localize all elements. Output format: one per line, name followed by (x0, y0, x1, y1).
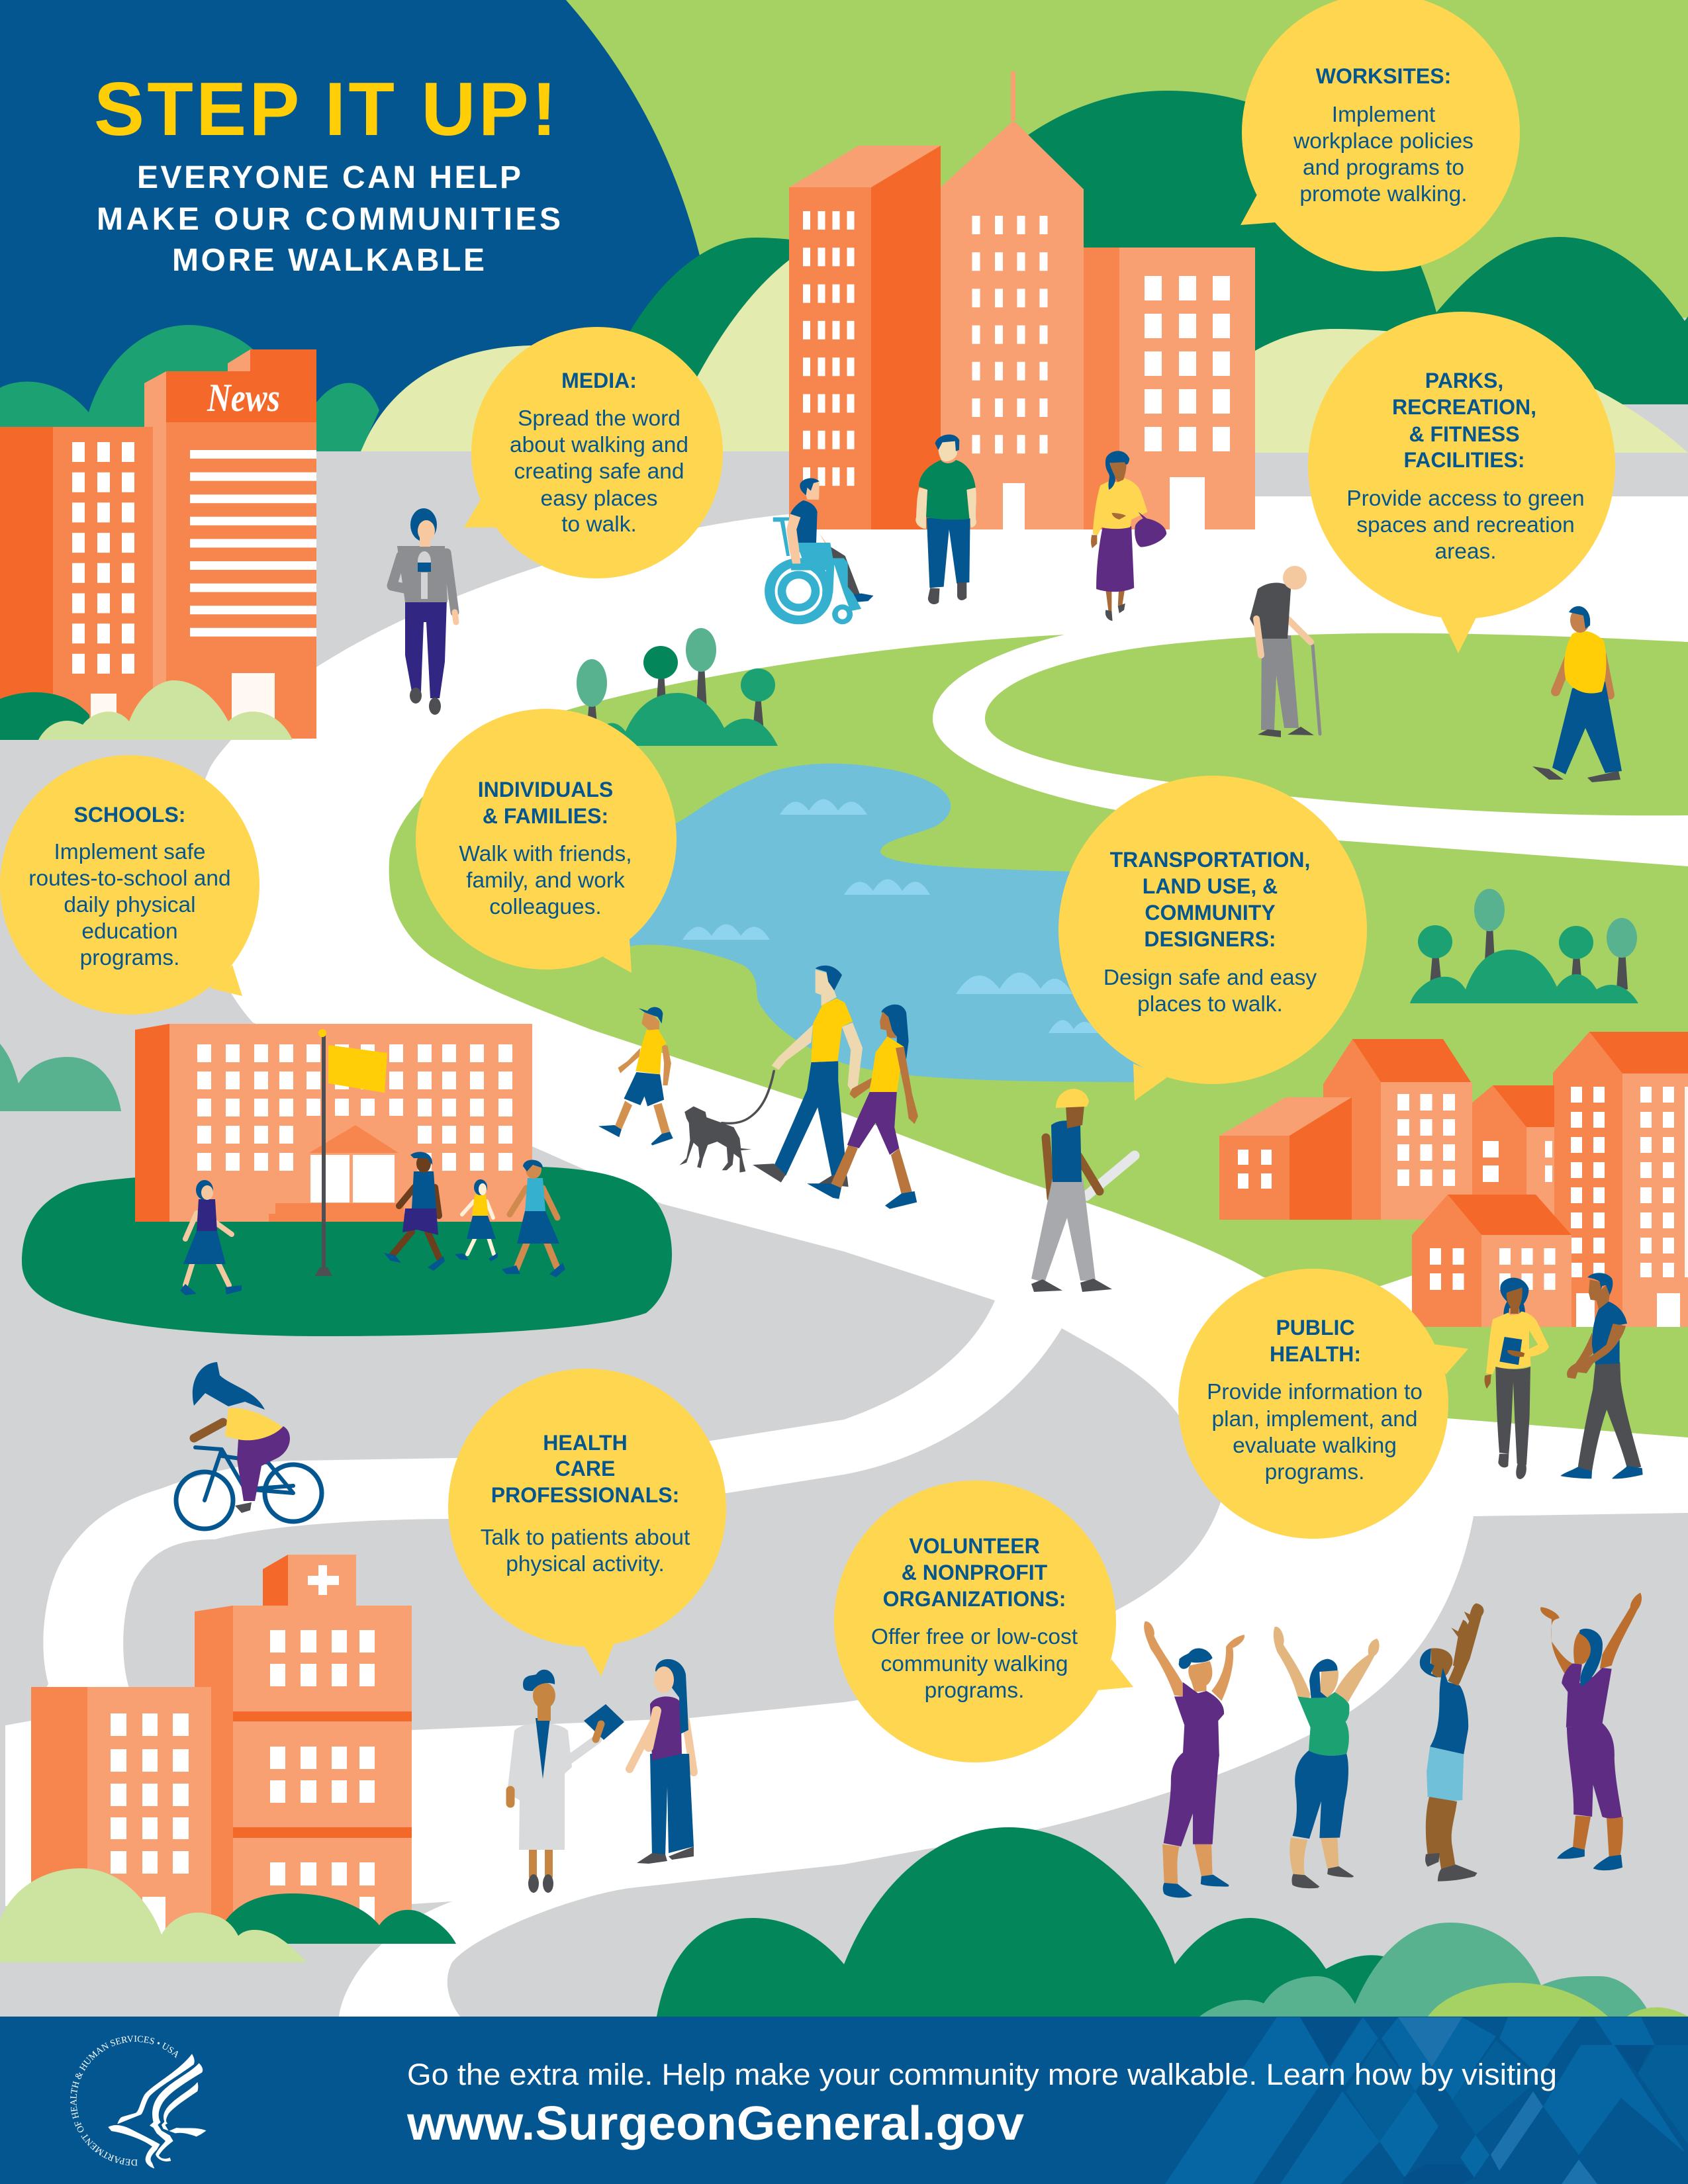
heading: health care: PROFESSIONALS: (491, 1483, 679, 1507)
body: individuals: family, and work (466, 868, 625, 893)
body: schools: programs. (80, 946, 179, 970)
title block (94, 68, 561, 278)
person: cyclist (176, 1362, 322, 1529)
heading: public health: PUBLIC (1276, 1316, 1355, 1340)
callout: public health (1178, 1269, 1468, 1539)
building: news (0, 325, 379, 740)
body: media: about walking and (510, 433, 688, 457)
heading: volunteer: VOLUNTEER (909, 1534, 1040, 1558)
callout: health care professionals (448, 1369, 726, 1676)
footer text: Go the extra mile. Help make your community more walkable. Learn how by visiting (407, 2058, 1557, 2091)
body: transportation: Design safe and easy (1103, 966, 1317, 990)
heading: individuals: & FAMILIES: (483, 804, 608, 828)
body: worksites: workplace policies (1293, 129, 1474, 154)
heading: parks: RECREATION, (1392, 395, 1536, 419)
body: schools: daily physical (64, 893, 196, 917)
body: worksites: and programs to (1303, 156, 1464, 180)
subtitle: MAKE OUR COMMUNITIES (97, 202, 561, 237)
trees: right grove (1410, 889, 1638, 1003)
body: public health: plan, implement, and (1211, 1407, 1418, 1432)
body: schools: Implement safe (54, 840, 206, 864)
icon: dog on leash (679, 1071, 774, 1173)
heading: transportation: TRANSPORTATION, (1110, 848, 1310, 872)
callout: individuals and families (416, 709, 677, 973)
trees: upper grove (577, 628, 778, 746)
body: parks: areas. (1434, 539, 1497, 564)
person: public health woman (1485, 1278, 1549, 1479)
footer pattern (1165, 2017, 1688, 2184)
body: volunteer: Offer free or low-cost (871, 1625, 1078, 1649)
person: construction worker (1031, 1089, 1135, 1292)
callout: worksites (1241, 0, 1520, 271)
callout: schools (0, 755, 259, 1015)
footer band (0, 2017, 1688, 2184)
body: parks: spaces and recreation (1356, 513, 1575, 537)
heading: media: MEDIA: (561, 369, 637, 392)
person: dancer in purple, first (1144, 1621, 1244, 1897)
heading: schools: SCHOOLS: (74, 803, 185, 827)
body: media: creating safe and (514, 459, 684, 484)
body: public health: Provide information to (1207, 1380, 1423, 1404)
heading: health care: CARE (555, 1457, 615, 1480)
person: school boy (384, 1152, 445, 1271)
body: media: to walk. (561, 512, 637, 537)
body: volunteer: programs. (925, 1678, 1024, 1703)
body: worksites: Implement (1332, 103, 1436, 127)
person: boy walking (598, 1007, 673, 1146)
body: transportation: places to walk. (1137, 992, 1283, 1017)
callout: parks (1308, 312, 1615, 653)
subtitle: EVERYONE CAN HELP (137, 160, 521, 195)
building: worksite center tower (941, 71, 1084, 529)
callout: media (464, 327, 723, 578)
body: individuals: Walk with friends, (459, 842, 632, 866)
body: public health: evaluate walking (1233, 1433, 1397, 1458)
heading: health care: HEALTH (543, 1431, 628, 1455)
heading: parks: PARKS, (1425, 369, 1503, 392)
person: woman in teal top (502, 1160, 565, 1277)
person: woman walking (807, 1005, 918, 1209)
icon: medical cross (308, 1565, 339, 1595)
heading: individuals: INDIVIDUALS (478, 778, 613, 801)
hills: bottom (657, 1827, 1688, 2017)
person: wheelchair user (765, 478, 874, 624)
HHS seal: DEPARTMENT OF HEALTH & HUMAN SERVICES • USA (70, 2036, 178, 2165)
heading: transportation: LAND USE, & (1143, 874, 1278, 898)
body: individuals: colleagues. (489, 895, 602, 919)
body: public health: programs. (1265, 1460, 1364, 1484)
person: public health man (1560, 1273, 1643, 1479)
person: school girl (180, 1180, 242, 1295)
heading: volunteer: & NONPROFIT (902, 1561, 1048, 1584)
building: worksite right block (1084, 248, 1255, 529)
heading: volunteer: ORGANIZATIONS: (883, 1587, 1066, 1611)
body: health care: Talk to patients about (481, 1525, 690, 1550)
building: houses (1219, 1032, 1688, 1327)
callout: volunteer (834, 1480, 1133, 1762)
person: woman talking with doctor (630, 1659, 694, 1864)
person: small girl (455, 1179, 498, 1261)
footer text (406, 2058, 1557, 2150)
heading: parks: & FITNESS (1409, 422, 1520, 446)
person: older man with cane (1250, 566, 1320, 737)
heading: public health: HEALTH: (1270, 1342, 1361, 1366)
flag (315, 1029, 387, 1276)
body: parks: Provide access to green (1346, 486, 1585, 511)
building: hospital (0, 1555, 456, 1962)
person: woman with handbag (1091, 451, 1166, 621)
person: man in green shirt (915, 434, 976, 604)
person: reporter (392, 508, 456, 715)
heading: transportation: COMMUNITY (1145, 901, 1276, 925)
heading: transportation: DESIGNERS: (1144, 927, 1276, 951)
body: volunteer: community walking (881, 1652, 1068, 1676)
body: worksites: promote walking. (1299, 182, 1468, 206)
body: schools: routes-to-school and (28, 866, 231, 891)
body: health care: physical activity. (506, 1552, 665, 1576)
building: school (135, 1024, 532, 1276)
person: dancer in green (1274, 1627, 1380, 1888)
footer text: www.SurgeonGeneral.gov (406, 2097, 1024, 2150)
lake (596, 764, 1172, 1082)
heading: worksites: WORKSITES: (1316, 64, 1451, 88)
person: man walking dog (753, 966, 863, 1187)
body: schools: education (81, 919, 178, 944)
subtitle: MORE WALKABLE (172, 243, 485, 278)
building: worksite left tower (789, 146, 941, 529)
news sign: News (207, 376, 280, 420)
person: doctor (507, 1670, 624, 1893)
person: dancer in purple, last (1540, 1593, 1642, 1870)
body: media: easy places (541, 486, 657, 511)
person: dancer in blue (1420, 1604, 1483, 1882)
heading: parks: FACILITIES: (1403, 448, 1525, 472)
main title: STEP IT UP! (94, 68, 557, 152)
person: man in yellow shirt walking (1532, 606, 1622, 782)
green island (22, 1166, 672, 1336)
body: media: Spread the word (518, 406, 680, 431)
callout: transportation (1058, 776, 1367, 1101)
